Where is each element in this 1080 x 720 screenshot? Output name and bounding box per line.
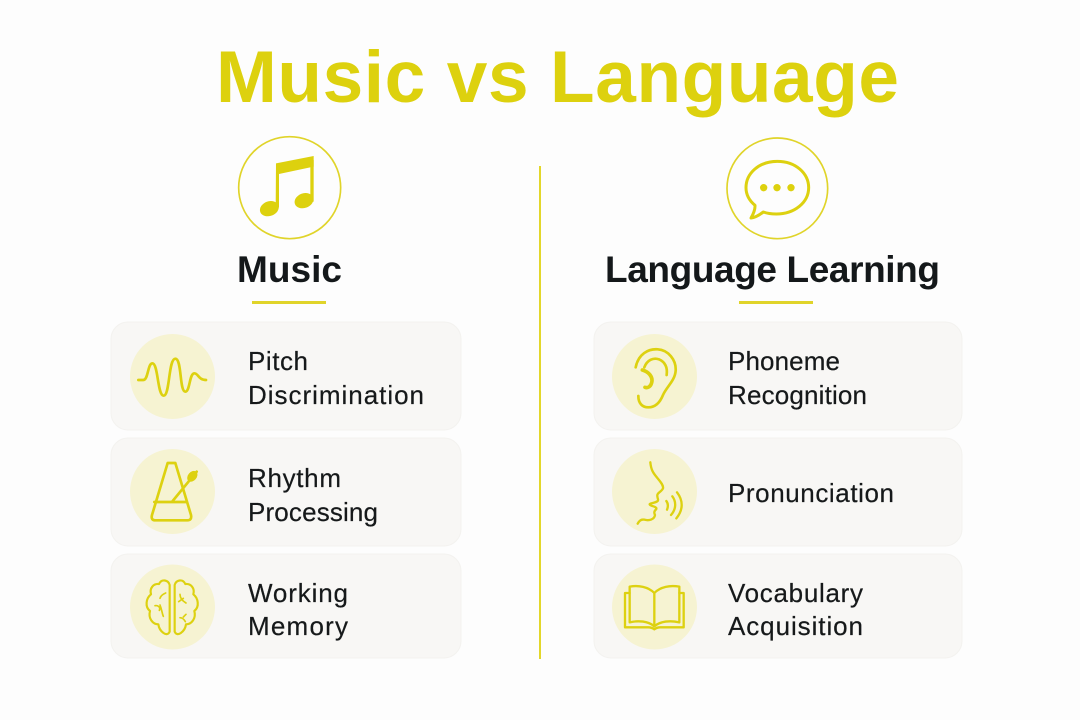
label: Vocabulary — [728, 578, 863, 608]
label: Rhythm — [248, 463, 341, 493]
card: phoneme recognition — [594, 322, 962, 430]
title: Music vs Language — [216, 37, 899, 118]
card: pronunciation — [594, 438, 962, 546]
label: Discrimination — [248, 380, 424, 410]
label: Pronunciation — [728, 478, 894, 508]
heading underline — [739, 301, 813, 304]
label: Working — [248, 578, 348, 608]
panel: music — [111, 137, 461, 658]
icon: speech bubble — [727, 138, 828, 239]
heading underline — [252, 301, 326, 304]
label: Recognition — [728, 380, 867, 410]
center divider — [539, 166, 541, 659]
icon: metronome — [152, 463, 198, 520]
icon: ear — [636, 349, 676, 407]
card: pitch discrimination — [111, 322, 461, 430]
icon: sound wave — [138, 359, 206, 396]
icon: open book — [625, 586, 684, 629]
label: Acquisition — [728, 611, 863, 641]
card: vocabulary acquisition — [594, 554, 962, 658]
heading: language learning: Language Learning — [605, 249, 940, 290]
icon: speaking profile — [638, 462, 682, 524]
panel: language learning — [594, 138, 962, 658]
label: Processing — [248, 497, 378, 527]
label: Phoneme — [728, 346, 840, 376]
icon: brain — [147, 580, 198, 634]
label: Pitch — [248, 346, 308, 376]
card: rhythm processing — [111, 438, 461, 546]
icon: music note — [239, 137, 341, 239]
card: working memory — [111, 554, 461, 658]
label: Memory — [248, 611, 348, 641]
heading: music: Music — [237, 249, 342, 290]
